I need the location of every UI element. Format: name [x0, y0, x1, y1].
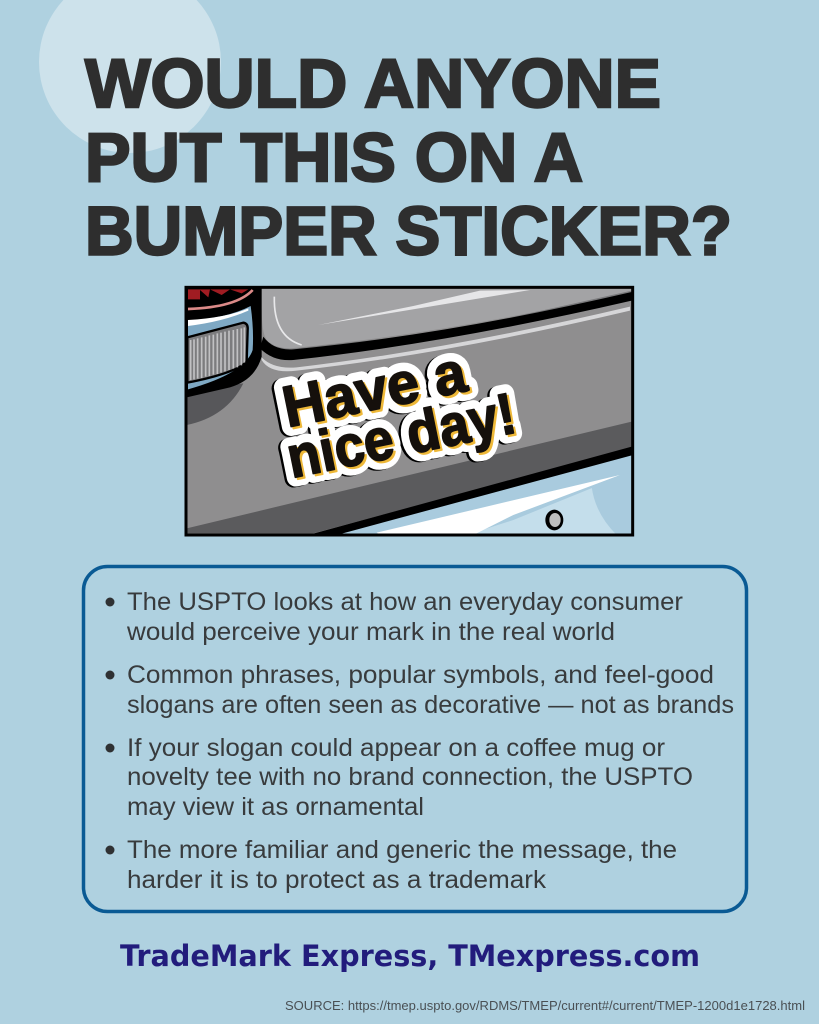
lower bumper shadow [187, 422, 632, 533]
sticker die-cut shadow: Have a [275, 340, 470, 441]
taillight lens [187, 323, 248, 383]
sticker text: Have a [277, 339, 472, 440]
illustration: bumper sticker on car [186, 287, 633, 535]
bullet 3 [106, 734, 693, 821]
decorative circle behind title [39, 0, 221, 153]
bullet 2: Common phrases, popular symbols, and feel-good [127, 661, 714, 689]
bullet 2 [106, 661, 734, 719]
sticker [275, 339, 524, 493]
bullet 1 [106, 588, 683, 646]
bullet 1: The USPTO looks at how an everyday consumer [127, 588, 683, 616]
trunk black seam [260, 292, 632, 360]
sticker text gold shadow [279, 341, 524, 493]
title: WOULD ANYONE [85, 45, 661, 122]
source note: SOURCE: https://tmep.uspto.gov/RDMS/TMEP/current#/current/TMEP-1200d1e1728.html [285, 998, 805, 1013]
sticker text [277, 339, 521, 491]
sticker die-cut white [277, 339, 521, 491]
sticker die-cut shadow [275, 340, 519, 492]
title [85, 45, 732, 270]
footer brand line: TradeMark Express, TMexpress.com [120, 939, 700, 973]
bullet 3: If your slogan could appear on a coffee mug or [127, 734, 665, 762]
sticker die-cut white: nice day! [281, 381, 521, 491]
red lens hatch [188, 289, 248, 299]
title: BUMPER STICKER? [85, 192, 732, 270]
sticker die-cut shadow: nice day! [279, 382, 519, 492]
blue taillight body [188, 306, 253, 389]
bullet 2: slogans are often seen as decorative — not as brands [127, 691, 734, 719]
sticker text gold shadow: Have a [279, 341, 474, 442]
panel: key points [84, 566, 746, 912]
bullet 1: would perceive your mark in the real world [126, 618, 615, 646]
highlight on bumper [262, 307, 630, 371]
image border [186, 287, 633, 535]
black line below bumper [308, 447, 632, 535]
bullet list [106, 588, 734, 894]
bullet 3: novelty tee with no brand connection, the USPTO [127, 763, 693, 791]
bolt [545, 510, 563, 530]
bullet 3: may view it as ornamental [127, 793, 424, 821]
reflective blue surface below bumper [323, 453, 632, 535]
bullet 4 [106, 836, 677, 894]
sticker die-cut white: Have a [277, 339, 472, 440]
bumper body [187, 287, 633, 535]
title: PUT THIS ON A [85, 119, 583, 196]
taillight shadow [187, 383, 243, 425]
bullet 4: harder it is to protect as a trademark [127, 866, 547, 894]
bullet 4: The more familiar and generic the message, the [127, 836, 677, 864]
sticker text gold shadow: nice day! [284, 383, 524, 493]
trunk panel [261, 288, 632, 348]
sticker text: nice day! [281, 381, 521, 491]
taillight housing [187, 287, 262, 397]
